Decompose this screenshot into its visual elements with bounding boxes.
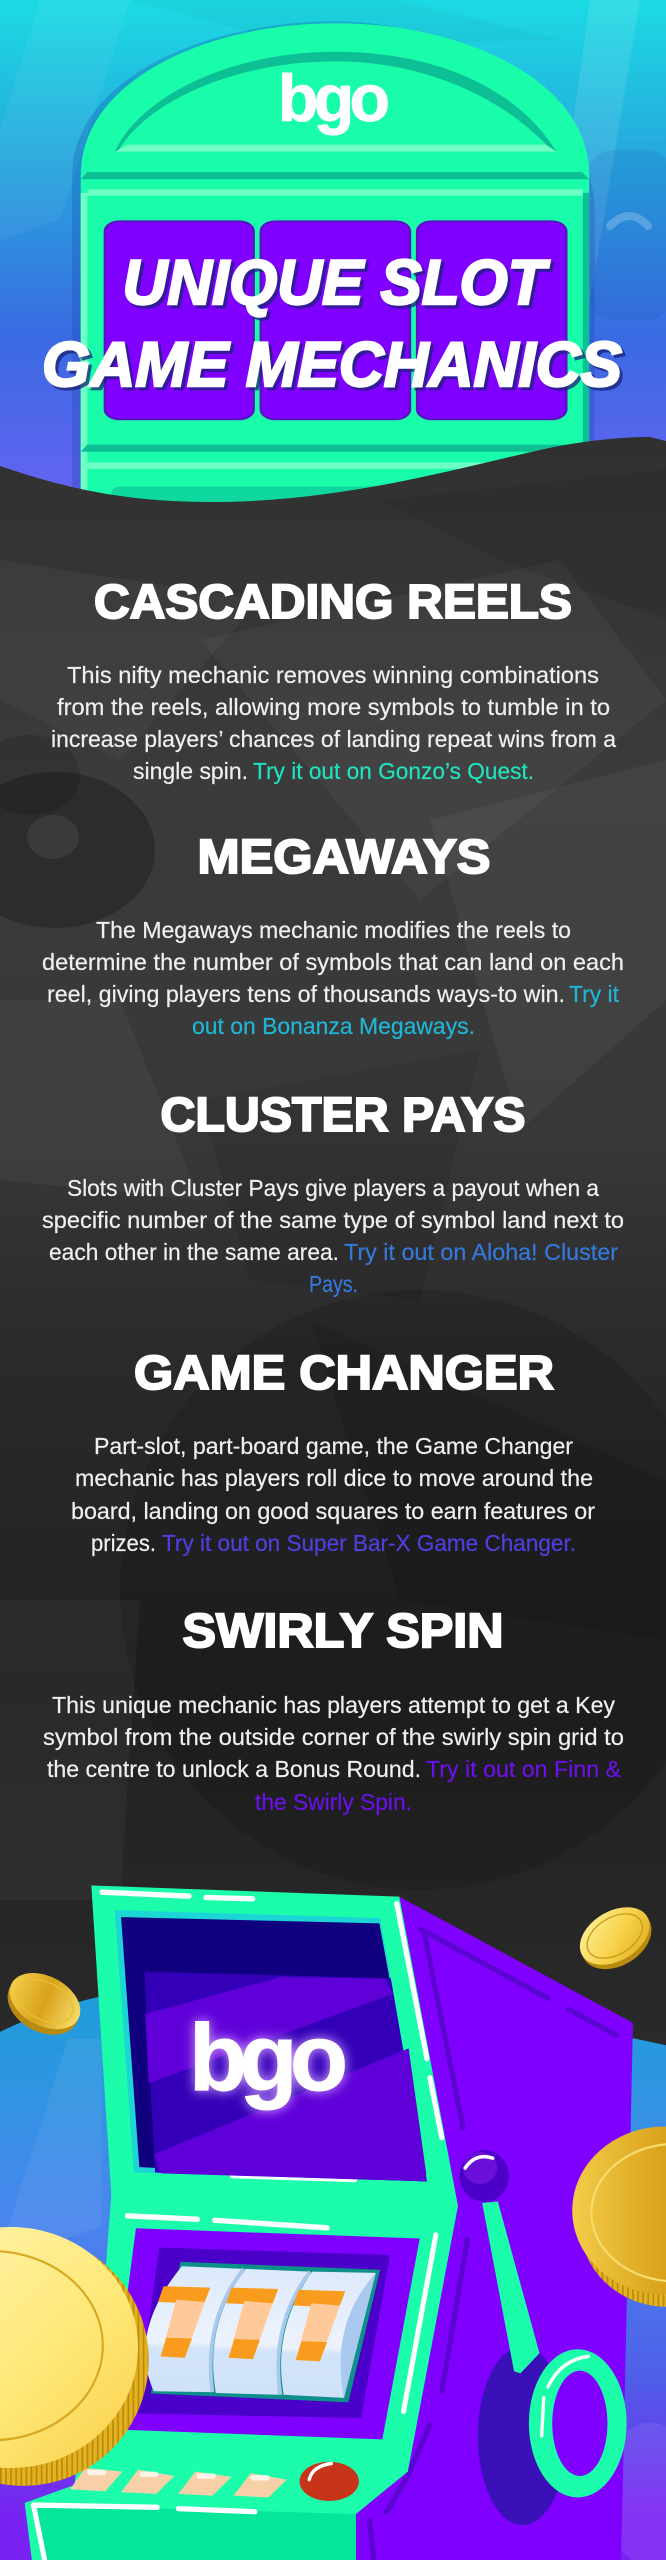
body: cluster pays: specific number of the same type of symbol land next to: [42, 1207, 624, 1233]
side panel lines: [370, 1929, 616, 2560]
slot machine front: [25, 1885, 458, 2560]
coin: big left: [0, 2227, 149, 2486]
machine cabinet: [81, 175, 589, 560]
dark background panel with wave: [0, 437, 666, 2120]
heading: cluster pays: CLUSTER PAYS: [160, 1089, 526, 1142]
buttons: [70, 2462, 359, 2501]
heading: swirly spin: SWIRLY SPIN: [182, 1605, 504, 1658]
digit 7 first: [158, 2286, 210, 2358]
body: cascading reels: increase players’ chances of landing repeat wins from a: [51, 726, 616, 752]
body: swirly spin: Try it out on Finn &: [426, 1756, 621, 1782]
top slot machine: [72, 21, 595, 560]
heading: cascading reels: CASCADING REELS: [94, 576, 572, 629]
section: swirly spin: [43, 1605, 624, 1815]
body: cluster pays: Pays.: [309, 1271, 358, 1297]
body: cluster pays: Slots with Cluster Pays give players a payout when a: [67, 1175, 599, 1201]
body: swirly spin: This unique mechanic has players attempt to get a Key: [52, 1692, 615, 1718]
background: blue gradient sky: [0, 0, 666, 520]
screen: [115, 1910, 427, 2181]
dark panel facets: [0, 470, 666, 1900]
body: swirly spin: the Swirly Spin.: [255, 1789, 412, 1815]
heading: megaways: MEGAWAYS: [198, 831, 490, 884]
cabinet trim: [81, 172, 589, 560]
machine shadow: [72, 21, 595, 560]
dome inner arch: [115, 52, 556, 152]
section: game changer: [71, 1347, 595, 1556]
machine highlights: [33, 1892, 442, 2560]
section: cascading reels: [51, 576, 616, 784]
coin: big right: [572, 2127, 666, 2307]
body: cascading reels: from the reels, allowing more symbols to tumble in to: [57, 694, 610, 720]
blue background dome: [0, 1994, 666, 2560]
machine dome: [81, 23, 589, 175]
body: megaways: out on Bonanza Megaways.: [192, 1013, 475, 1039]
heading: game changer: GAME CHANGER: [134, 1347, 554, 1400]
body: game changer: Part-slot, part-board game, the Game Changer: [94, 1433, 573, 1459]
reels 777: [145, 2266, 376, 2398]
reels: [105, 221, 566, 419]
body: cluster pays: each other in the same area.: [49, 1239, 339, 1265]
reel panel: [110, 2228, 420, 2439]
body: megaways: determine the number of symbols that can land on each: [42, 949, 624, 975]
bottom illustration: [0, 1885, 666, 2560]
body: game changer: [71, 1433, 595, 1556]
body: cascading reels: Try it out on Gonzo’s Quest.: [253, 758, 534, 784]
body: cluster pays: Try it out on Aloha! Cluster: [344, 1239, 618, 1265]
machine base panel: [32, 2505, 356, 2560]
faint blue shapes: [0, 2039, 666, 2560]
body: megaways: The Megaways mechanic modifies the reels to: [96, 917, 571, 943]
coin: small top right: [571, 1895, 661, 1981]
body: megaways: reel, giving players tens of thousands ways-to win.: [47, 981, 565, 1007]
body: megaways: [42, 917, 624, 1039]
body: game changer: board, landing on good squares to earn features or: [71, 1498, 595, 1524]
body: megaways: Try it: [569, 981, 620, 1007]
body: game changer: mechanic has players roll dice to move around the: [75, 1465, 593, 1491]
body: swirly spin: the centre to unlock a Bonus Round.: [47, 1756, 421, 1782]
lever: [460, 2150, 627, 2525]
logo: bgo on screen: bgo: [189, 2005, 348, 2111]
body: swirly spin: [43, 1692, 624, 1815]
title: [42, 248, 622, 400]
body: cascading reels: [51, 662, 616, 784]
body: game changer: Try it out on Super Bar-X Game Changer.: [162, 1530, 576, 1556]
section: megaways: [42, 831, 624, 1039]
body: cluster pays: [42, 1175, 624, 1297]
title line 1: UNIQUE SLOT: [122, 248, 550, 318]
slot machine side: [356, 1897, 633, 2560]
body: swirly spin: symbol from the outside corner of the swirly spin grid to: [43, 1724, 624, 1750]
body: game changer: prizes.: [91, 1530, 156, 1556]
digit 7 second: [226, 2288, 278, 2359]
body: cascading reels: This nifty mechanic removes winning combinations: [67, 662, 599, 688]
background: faint sky shapes: [0, 0, 666, 320]
title line 2: GAME MECHANICS: [42, 330, 622, 400]
coin: small top left: [0, 1962, 89, 2046]
body: cascading reels: single spin.: [133, 758, 248, 784]
section: cluster pays: [42, 1089, 624, 1297]
digit 7 third: [293, 2290, 345, 2361]
logo: bgo top: bgo: [278, 61, 390, 135]
